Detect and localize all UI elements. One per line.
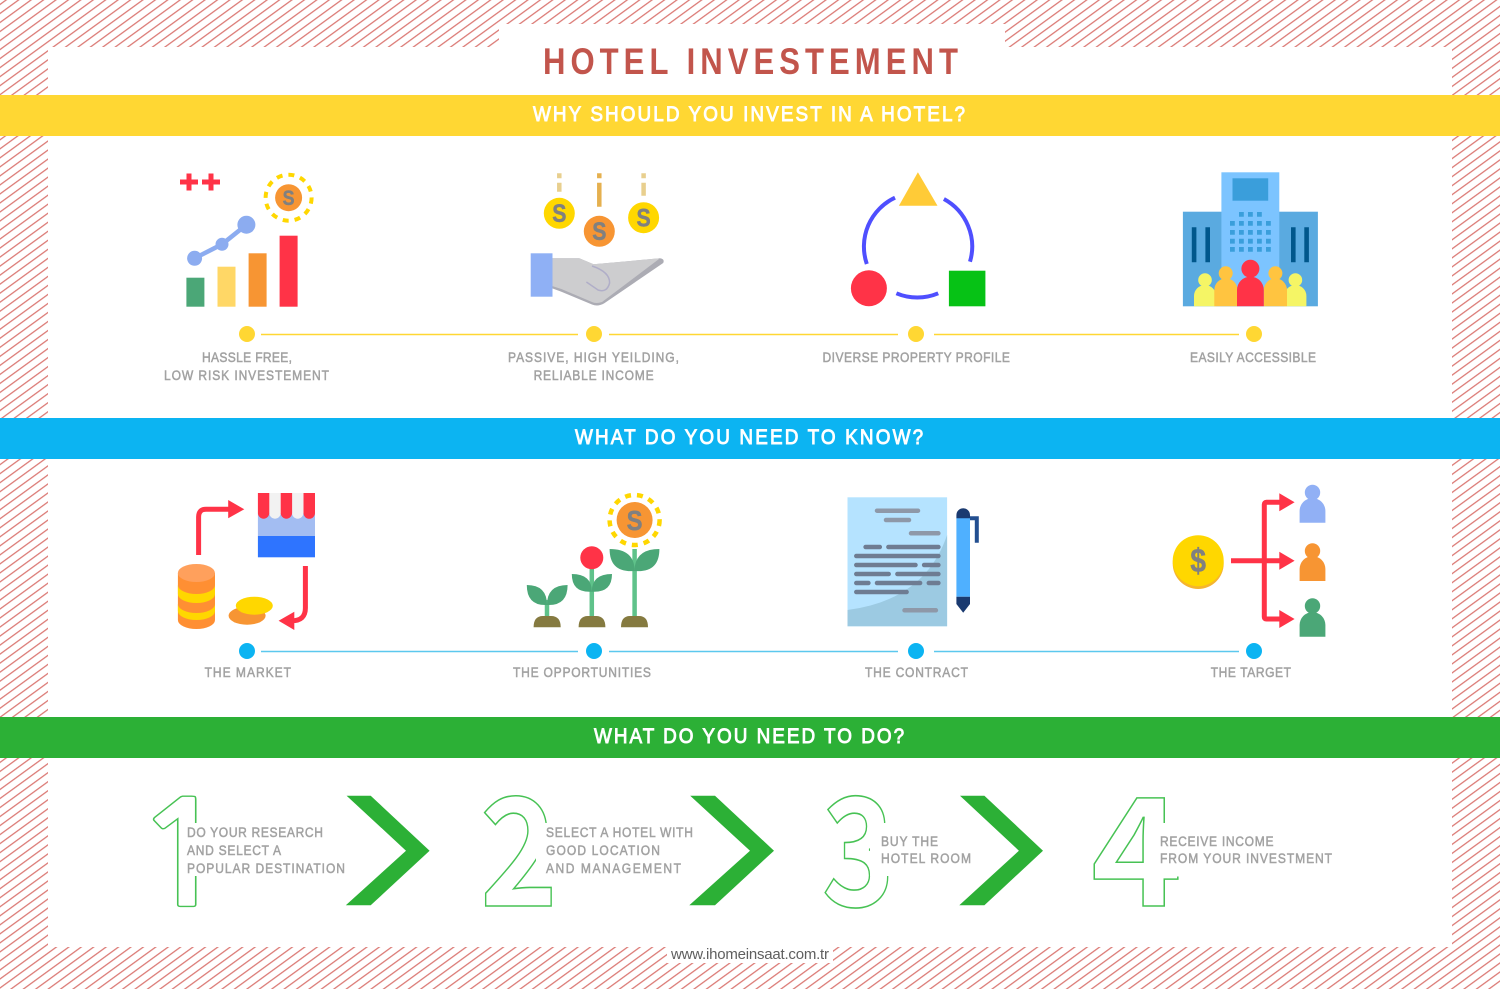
icon: income to target people: $ bbox=[1190, 543, 1206, 580]
icon: market cycle bbox=[178, 493, 315, 630]
step 1 text: DO YOUR RESEARCH bbox=[187, 824, 323, 840]
band: why invest: WHY SHOULD YOU INVEST IN A HOTEL? bbox=[533, 103, 965, 126]
step 1 number: 1 bbox=[132, 785, 234, 928]
label backing masks bbox=[183, 823, 1340, 877]
step 2 number: 2 bbox=[480, 732, 558, 950]
label: passive income bbox=[508, 349, 679, 383]
step 2 text bbox=[546, 824, 693, 876]
label: the opportunities: THE OPPORTUNITIES bbox=[513, 664, 651, 680]
band: why invest bbox=[0, 95, 1500, 136]
step 4 number: 4 bbox=[1091, 732, 1182, 949]
label: hassle free: HASSLE FREE, bbox=[202, 349, 292, 365]
label: hassle free bbox=[164, 349, 329, 383]
step 2 text: SELECT A HOTEL WITH bbox=[546, 824, 693, 840]
icon: contract and pen bbox=[848, 497, 977, 626]
step 2 text: GOOD LOCATION bbox=[546, 842, 660, 858]
timeline: blue row bbox=[239, 643, 1262, 659]
label: passive income: RELIABLE INCOME bbox=[534, 367, 654, 383]
band: what to know bbox=[0, 418, 1500, 459]
label: the market: THE MARKET bbox=[205, 664, 291, 680]
icon: growth chart bbox=[180, 174, 312, 307]
label: the contract: THE CONTRACT bbox=[865, 664, 968, 680]
step 1 text bbox=[187, 824, 345, 876]
icon: coins falling into hand: S bbox=[637, 204, 651, 232]
icon: diverse shapes cycle bbox=[851, 172, 985, 306]
step 4 text bbox=[1160, 833, 1332, 866]
label: passive income: PASSIVE, HIGH YEILDING, bbox=[508, 349, 679, 365]
timeline: yellow row bbox=[239, 326, 1262, 342]
label: hassle free: LOW RISK INVESTEMENT bbox=[164, 367, 329, 383]
icon: coins falling into hand: S bbox=[592, 217, 606, 245]
step 4 text: RECEIVE INCOME bbox=[1160, 833, 1274, 849]
label: easily accessible: EASILY ACCESSIBLE bbox=[1190, 349, 1316, 365]
step 3 text: BUY THE bbox=[881, 833, 938, 849]
title: HOTEL INVESTEMENT bbox=[543, 42, 958, 83]
icon: coins falling into hand bbox=[531, 173, 664, 306]
title notch bbox=[499, 24, 1005, 48]
icon: income to target people bbox=[1173, 485, 1325, 637]
label: the target: THE TARGET bbox=[1211, 664, 1291, 680]
icon: growing plants: S bbox=[627, 504, 643, 536]
step 1 text: AND SELECT A bbox=[187, 842, 281, 858]
footer url: www.ihomeinsaat.com.tr bbox=[670, 946, 829, 963]
icon: coins falling into hand: S bbox=[552, 199, 566, 227]
chevrons bbox=[346, 796, 1043, 905]
step 1 text: POPULAR DESTINATION bbox=[187, 860, 345, 876]
footer notch bbox=[667, 946, 833, 963]
band: what to do: WHAT DO YOU NEED TO DO? bbox=[594, 725, 904, 748]
band: what to know: WHAT DO YOU NEED TO KNOW? bbox=[575, 426, 923, 449]
icon: growing plants bbox=[527, 495, 660, 627]
icon: growth chart: S bbox=[283, 187, 295, 210]
band: what to do bbox=[0, 717, 1500, 758]
step 4 text: FROM YOUR INVESTMENT bbox=[1160, 850, 1332, 866]
step 2 text: AND MANAGEMENT bbox=[546, 860, 681, 876]
step 3 number: 3 bbox=[822, 732, 895, 950]
icon: hotel building with people bbox=[1183, 172, 1318, 306]
step 3 text: HOTEL ROOM bbox=[881, 850, 971, 866]
step 3 text bbox=[881, 833, 971, 866]
label: diverse property: DIVERSE PROPERTY PROFILE bbox=[822, 349, 1010, 365]
